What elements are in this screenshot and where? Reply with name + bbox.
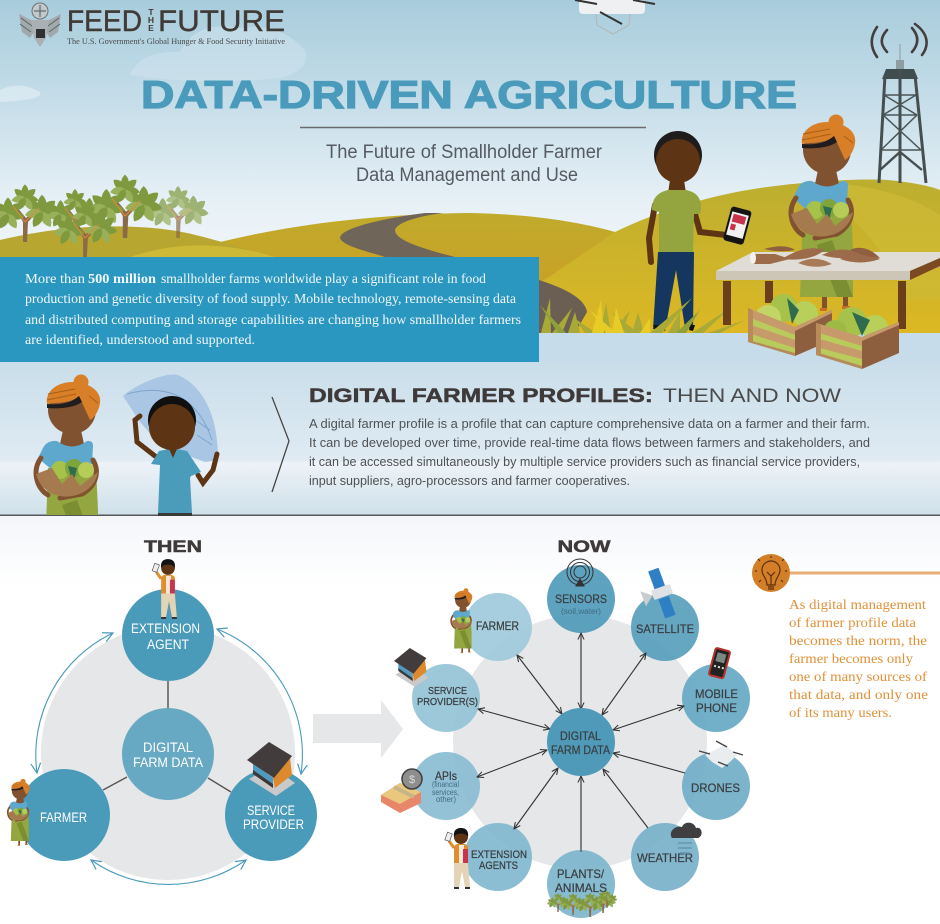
label: apis	[432, 769, 459, 804]
intro text panel	[0, 257, 539, 362]
sky background	[0, 0, 940, 333]
diagram: now	[381, 538, 750, 918]
label: plants animals: PLANTS/	[557, 867, 605, 881]
subtitle: Data Management and Use	[356, 165, 578, 186]
label: sensors	[555, 592, 607, 616]
illustration: crates of cabbage	[748, 294, 899, 369]
illustration: table with yams	[716, 246, 940, 329]
callout text: farmer becomes only	[789, 652, 913, 667]
grass	[540, 298, 745, 333]
intro text panel: are identified, understood and supported.	[25, 333, 255, 348]
body text: It can be developed over time, provide real-time data flows between farmers and stakeholders, and	[309, 436, 870, 450]
icon: satellite	[635, 566, 680, 623]
intro text panel: production and genetic diversity of food supply. Mobile technology, remote-sensing data	[25, 292, 517, 307]
icon: house	[247, 742, 295, 796]
callout text: of farmer profile data	[789, 616, 917, 631]
intro text panel: and distributed computing and storage capabilities are changing how smallholder farmers	[25, 313, 521, 328]
node: digital farm data	[547, 708, 615, 776]
body text: input suppliers, agro-processors and farmer cooperatives.	[309, 474, 630, 488]
icon: money: $	[409, 774, 415, 786]
title: DATA-DRIVEN AGRICULTURE	[141, 74, 797, 117]
heading: then: THEN	[144, 538, 202, 556]
strip below landscape	[0, 333, 940, 362]
label: farmer: FARMER	[476, 619, 519, 633]
heading: THEN AND NOW	[663, 385, 842, 407]
illustration: farmer with tablet	[649, 131, 752, 331]
icon: mobile phone	[707, 646, 732, 680]
diagram: then	[8, 538, 317, 884]
trees	[0, 175, 209, 257]
label: apis: other)	[436, 795, 456, 804]
node: extension agent	[122, 589, 214, 681]
icon: farmer	[451, 588, 472, 653]
illustration: woman then	[34, 374, 100, 515]
icon: tablet	[723, 206, 752, 245]
label: sensors: (soil,water)	[561, 607, 601, 616]
logo: Feed the Future: T	[148, 7, 154, 17]
body text: A digital farmer profile is a profile that can capture comprehensive data on a farmer and their farm.	[309, 417, 870, 431]
node: farmer	[18, 769, 110, 861]
label: mobile phone	[695, 687, 738, 715]
node: digital farm data: FARM DATA	[133, 755, 203, 770]
label: mobile phone: MOBILE	[695, 687, 738, 701]
subtitle: The Future of Smallholder Farmer	[326, 142, 603, 163]
label: plants animals	[555, 867, 607, 895]
label: drones: DRONES	[691, 781, 740, 795]
callout text: that data, and only one	[789, 688, 928, 703]
icon: seal	[19, 3, 61, 47]
node: extension agent: AGENT	[147, 637, 189, 652]
label: service providers: PROVIDER(S)	[417, 697, 478, 708]
illustration: farmer woman	[791, 114, 855, 311]
heading: now: NOW	[558, 538, 611, 556]
icon: extension agent	[445, 828, 470, 889]
nodes: now	[412, 565, 750, 918]
node: digital farm data: FARM DATA	[551, 743, 610, 757]
label: service providers	[417, 686, 478, 708]
subtitle	[326, 142, 603, 186]
label: satellite: SATELLITE	[636, 622, 694, 636]
logo: Feed the Future: FEED	[67, 5, 142, 38]
callout: lightbulb note	[752, 554, 940, 721]
node: extension agent: EXTENSION	[131, 621, 200, 636]
crate 1	[748, 294, 832, 356]
node: service provider: SERVICE	[247, 803, 295, 818]
label: plants animals: ANIMALS	[555, 881, 607, 895]
panel: digital farmer profiles	[0, 362, 940, 516]
arrow: then to now	[313, 700, 403, 758]
landscape hills and road	[0, 179, 940, 333]
node: digital farm data: DIGITAL	[560, 729, 601, 743]
icon: signal tower	[872, 24, 927, 183]
arrows: now	[477, 633, 685, 852]
callout text: As digital management	[789, 598, 926, 613]
icon: drone	[575, 0, 655, 34]
body text: it can be accessed simultaneously by multiple service providers such as financial service providers,	[309, 455, 860, 469]
logo: Feed the Future: The U.S. Government's Global Hunger & Food Security Initiative	[67, 36, 285, 46]
node: digital farm data	[122, 708, 214, 800]
label: sensors: SENSORS	[555, 592, 607, 606]
icon: drone small	[699, 741, 743, 768]
label: weather: WEATHER	[637, 851, 693, 865]
icon: chevron	[272, 397, 289, 492]
node: farmer: FARMER	[40, 810, 87, 825]
logo: Feed the Future: H	[148, 15, 154, 25]
heading: DIGITAL FARMER PROFILES:	[309, 385, 653, 407]
logo: Feed the Future: E	[148, 23, 154, 33]
callout text: becomes the norm, the	[789, 634, 927, 649]
heading	[309, 385, 842, 407]
label: apis: APIs	[435, 769, 457, 783]
icon: farmer	[8, 779, 30, 846]
node: service provider: PROVIDER	[243, 817, 304, 832]
icon: lightbulb	[752, 554, 790, 592]
logo: Feed the Future: FUTURE	[158, 5, 285, 38]
intro text panel: 500 million	[88, 272, 156, 287]
icon: plants	[547, 891, 617, 917]
label: extension agents: EXTENSION	[471, 849, 527, 861]
node: digital farm data: DIGITAL	[143, 740, 193, 755]
label: extension agents: AGENTS	[479, 860, 518, 872]
node: service provider	[225, 769, 317, 861]
label: service providers: SERVICE	[428, 686, 467, 697]
body text	[309, 417, 870, 488]
logo: Feed the Future	[19, 3, 285, 47]
callout text: one of many sources of	[789, 670, 927, 685]
label: mobile phone: PHONE	[696, 701, 737, 715]
intro text panel: More than	[25, 272, 85, 287]
arrows: then cycle	[36, 629, 302, 884]
label: apis: (financial	[432, 780, 459, 789]
label: extension agents	[471, 849, 527, 872]
icon: sensor rings	[567, 559, 593, 586]
icon: rain cloud	[671, 823, 702, 854]
intro text panel: smallholder farms worldwide play a significant role in food	[161, 272, 486, 287]
icon: house	[394, 648, 429, 687]
lower background	[0, 516, 940, 586]
callout text	[789, 598, 928, 721]
callout text: of its many users.	[789, 706, 892, 721]
illustration: man with cloth	[123, 375, 218, 516]
icon: money	[381, 769, 422, 813]
label: apis: services,	[432, 788, 459, 797]
icon: extension agent	[152, 559, 177, 619]
crate 2	[816, 307, 899, 369]
